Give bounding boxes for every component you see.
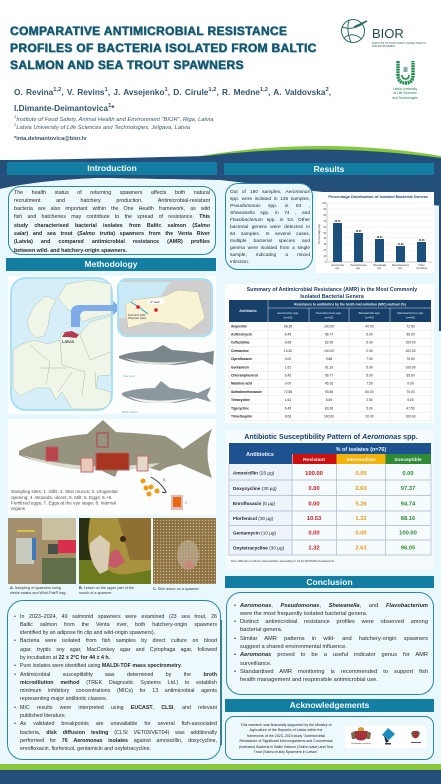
table: antibiotic susceptibility pattern of Aeromonas: 0.00 (402, 471, 414, 477)
table: antibiotic susceptibility pattern of Aeromonas: Oxytetracycline (30 µg) (233, 546, 285, 550)
illustration: Baltic salmon (122, 381, 211, 414)
contact email: *inta.deimantovica@bior.lv (14, 136, 87, 142)
table: antibiotic susceptibility pattern of Aeromonas: Gentamycin (10 µg) (233, 530, 277, 536)
table: summary of antimicrobial resistance: 5.00 (366, 332, 373, 336)
table: antibiotic susceptibility pattern of Aeromonas: 100.00 (399, 530, 417, 536)
logo: BIOR: INSTITUTE OF FOOD SAFETY, ANIMAL HEALTH (372, 42, 425, 45)
table: summary of antimicrobial resistance: 9.68 (285, 341, 291, 345)
table: summary of antimicrobial resistance: 8.06 (285, 414, 291, 418)
panel: introduction text: recruitment and hatchery production. Antimicrobial-resistant (14, 198, 210, 204)
illustration: sea trout (119, 345, 214, 378)
caption: sampling sites: Sampling sites: 1. Gills; 2. Skin mucus; 3. Urogenital (11, 489, 117, 494)
table: antibiotic susceptibility pattern of Aeromonas: 100.00 (305, 471, 323, 477)
panel: methods list: by incubation at 22 ± 2°C for 44 ± 4 h. (20, 655, 110, 661)
funding statement: Agriculture of the Republic of Latvia within the (250, 728, 322, 732)
authors: I.Dimante-Deimantovica1* (14, 103, 115, 113)
table title: Isolated Bacterial Genera (300, 294, 364, 300)
icon: eggs (140, 478, 160, 496)
table: summary of antimicrobial resistance: 5.00 (407, 398, 414, 402)
panel: methods list: enrofloxacin, florfenicol, gentamicin and oxytetracycline. (20, 746, 151, 752)
panel: methods list: Pure isolates were identified using MALDI-TOF mass spectrometry. (20, 663, 182, 669)
panel: methods list (7, 600, 221, 760)
table: summary of antimicrobial resistance: Flavobacterium spp. (397, 311, 424, 315)
panel: methods list: representing major antibiotic classes. (20, 696, 107, 702)
table: summary of antimicrobial resistance: 95.00 (406, 332, 415, 336)
title (10, 24, 317, 72)
logo: BIOR: AND ENVIRONMENT (372, 45, 395, 48)
caption: photo B (79, 586, 134, 595)
panel: methods list: As validated breakpoints are unavailable for several fish-associated (20, 721, 217, 727)
panel: conclusion list: Aeromonas proved to be a useful indicator genus for AMR (240, 652, 428, 658)
logo: Ministry of Agriculture: Zemkopības ministrija (351, 743, 371, 745)
panel: introduction text: between wild- and hatchery-origin spawners. (14, 248, 127, 254)
bar chart: percentage distribution of isolated bacterial genera: 33.68 (419, 240, 425, 242)
table: summary of antimicrobial resistance: Antibiotic (239, 309, 257, 313)
logo: Latvia University of Life Sciences and Technologies (392, 61, 418, 100)
table title: Summary of Antimicrobial Resistance (AMR) in the Most Commonly (247, 287, 417, 293)
map: Venta River inset: Pelči farm (MD) (128, 314, 146, 317)
map: Europe with Latvia highlighted (11, 278, 112, 410)
table: antibiotic susceptibility pattern of Aeromonas: 1.32 (355, 516, 367, 522)
table: summary of antimicrobial resistance: 83.26 (325, 406, 333, 410)
bar chart: percentage distribution of isolated bacterial genera: spp. (335, 267, 340, 270)
logo: Latvia University of Life Sciences and Technologies: and Technologies (392, 96, 418, 100)
bar chart: percentage distribution of isolated bacterial genera: 20 (323, 250, 327, 252)
illustration: Baltic salmon: Baltic salmon (122, 410, 139, 414)
table: antibiotic susceptibility pattern of Aeromonas: 0.00 (308, 502, 320, 508)
map: Europe with Latvia highlighted: Latvia (62, 339, 75, 344)
bar chart: percentage distribution of isolated bacterial genera: 70 (323, 221, 327, 223)
bar chart: percentage distribution of isolated bacterial genera: Percentage (%) (317, 224, 321, 244)
table: summary of antimicrobial resistance: 5.00 (366, 374, 373, 378)
table: antibiotic susceptibility pattern of Aeromonas: 5.26 (355, 502, 367, 508)
table: summary of antimicrobial resistance: 2.50 (366, 349, 373, 353)
panel: results text: Flavobacterium spp. in 53. Other (230, 218, 310, 223)
funding statement: Trout (Salmo trutta) Spawners in Latvia”. (254, 750, 318, 754)
bar chart: percentage distribution of isolated bacterial genera: Aeromonas (331, 264, 345, 267)
panel: results text: bacterial genera were detected in (230, 225, 310, 230)
affiliations (14, 114, 214, 131)
bar chart: percentage distribution of isolated bacterial genera: 10 (323, 256, 327, 258)
table: antibiotic susceptibility pattern of Aeromonas: 88.16 (401, 516, 416, 522)
table: summary of antimicrobial resistance: Resistance to antibiotics by the broth microdilution (MIC) method (%) (294, 302, 406, 306)
bar chart: percentage distribution of isolated bacterial genera: Other (418, 264, 425, 267)
table: summary of antimicrobial resistance: 0.00 (285, 357, 291, 361)
panel: conclusion list (226, 592, 434, 695)
panel: conclusion list: Similar AMR patterns in wild- and hatchery-origin spawners (240, 636, 428, 642)
table: summary of antimicrobial resistance: Trimethoprim (231, 414, 252, 418)
logo: Latvia University of Life Sciences and Technologies: of Life Sciences (393, 91, 417, 95)
panel: results text: Shewanella spp. in 74 , and (230, 211, 310, 216)
heading: Introduction (7, 162, 217, 175)
panel: conclusion list: surveillance. (240, 661, 272, 667)
bar chart: percentage distribution of isolated bacterial genera (316, 192, 434, 273)
panel: conclusion list: Distinct antimicrobial resistance profiles were observed among (240, 619, 428, 625)
caption: photo A: A. Sampling of spawners using (10, 586, 61, 590)
table: summary of antimicrobial resistance: Ceftazidime (231, 341, 250, 345)
panel: methods list: identified by an adipose fin clip and wild-origin spawners). (20, 630, 155, 636)
affiliations: 1Institute of Food Safety, Animal Health and Environment “BIOR”, Riga, Latvia (14, 114, 213, 122)
bar chart: percentage distribution of isolated bacterial genera: 60 (323, 227, 327, 229)
bar chart: percentage distribution of isolated bacterial genera: 80 (323, 215, 327, 217)
caption: sampling sites: Fertilized eggs; 7. Eggs at the eye stage; 8. Internal (11, 500, 116, 506)
funding statement: framework of the 2023–2024 study “Antimicrobial (247, 734, 325, 738)
table: antibiotic susceptibility pattern of Aeromonas: 10.53 (307, 516, 322, 522)
table: antibiotic susceptibility pattern of Aeromonas: Antibiotics (246, 452, 274, 458)
table: summary of antimicrobial resistance: 10.00 (365, 414, 374, 418)
title: PROFILES OF BACTERIA ISOLATED FROM BALTIC (10, 40, 317, 54)
bar chart: percentage distribution of isolated bacterial genera: 30 (323, 244, 327, 246)
table: summary of antimicrobial resistance: 2.50 (366, 398, 373, 402)
table: summary of antimicrobial resistance: 93.55 (325, 390, 333, 394)
table: summary of antimicrobial resistance: 45.16 (325, 382, 333, 386)
table title: Antibiotic Susceptibility Pattern of Aeromonas spp. (244, 433, 418, 441)
panel: results text: Out of 190 samples, Aeromonas (230, 190, 310, 195)
panel: methods list: Bacteria were isolated from fish samples by direct culture on blood (20, 638, 217, 644)
table: summary of antimicrobial resistance: 100.00 (405, 341, 416, 345)
panel: methods list: agar, tryptic soy agar, MacConkey agar and Cytophaga agar, followed (20, 647, 217, 653)
arrow: map to Venta River inset (71, 301, 121, 327)
table: summary of antimicrobial resistance: 91.29 (325, 365, 333, 369)
affiliations: 2Latvia University of Life Sciences and Technologies, Jelgava, Latvia (14, 122, 190, 131)
table: summary of antimicrobial resistance: 72.50 (406, 324, 415, 328)
table: antibiotic susceptibility pattern of Aeromonas: Florfenicol (30 µg) (233, 516, 274, 521)
table: summary of antimicrobial resistance: 5.00 (366, 406, 373, 410)
map: Venta River inset: Pārplūdes ūdeņi (128, 317, 147, 320)
table: summary of antimicrobial resistance: 0.00 (407, 382, 414, 386)
icon: eye-stage egg sample (171, 495, 188, 510)
panel: methods list: In 2023–2024, 49 salmonid spawners were examined (23 sea trout, 26 (20, 614, 217, 620)
table: summary of antimicrobial resistance: 100.00 (405, 349, 416, 353)
heading: Acknowledgements: Acknowledgements (290, 700, 369, 710)
table: antibiotic susceptibility pattern of Aeromonas: 97.37 (401, 486, 415, 492)
table: summary of antimicrobial resistance: 8.06 (326, 398, 332, 402)
table: summary of antimicrobial resistance: 5.00 (366, 365, 373, 369)
logo: BIOR (341, 19, 426, 48)
table: summary of antimicrobial resistance: 6.45 (285, 332, 291, 336)
bar chart: percentage distribution of isolated bacterial genera: spp. (398, 267, 403, 270)
logos: partner organisations (377, 726, 426, 748)
table: summary of antimicrobial resistance: 98.39 (284, 324, 292, 328)
table: antibiotic susceptibility pattern of Aeromonas (226, 430, 434, 569)
table: summary of antimicrobial resistance: Sulfadimethoxazole (231, 390, 262, 394)
panel: sampling sites on a fish (8, 419, 216, 515)
icon: milt tube (151, 477, 166, 493)
table: summary of antimicrobial resistance: Azithromycin (231, 332, 252, 336)
heading: Acknowledgements (225, 699, 434, 712)
panel: conclusion list: health management and responsible antimicrobial use. (240, 677, 378, 683)
panel: methods list: MIC results were interpreted using EUCAST, CLSI, and relevant (20, 705, 217, 711)
panel: results text: spp. were isolated in 125 samples, (230, 197, 310, 202)
bar chart: percentage distribution of isolated bacterial genera: spp. (377, 267, 382, 270)
panel: results text: sample, indicating a mixed (230, 253, 310, 258)
bar chart: percentage distribution of isolated bacterial genera: 38.95 (377, 237, 383, 239)
table: summary of antimicrobial resistance: 1.61 (285, 365, 291, 369)
table: summary of antimicrobial resistance: (n=62) (325, 316, 333, 320)
table: antibiotic susceptibility pattern of Aeromonas: 0.00 (355, 471, 367, 477)
bar chart: percentage distribution of isolated bacterial genera: 27.89 (398, 244, 404, 246)
table: summary of antimicrobial resistance: 14.52 (284, 349, 292, 353)
title: COMPARATIVE ANTIMICROBIAL RESISTANCE (10, 24, 287, 38)
caption: photo A: sterile swabs and Whirl-Pak® bag. (10, 590, 66, 594)
panel: conclusion list: Standardised AMR monitoring is recommended to support fish (240, 669, 428, 675)
caption: photo B: mouth of a spawner. (79, 590, 112, 594)
bars (333, 223, 426, 262)
table: summary of antimicrobial resistance: Tigecycline (231, 406, 249, 410)
panel: methods list: minimum inhibitory concentrations (MICs) for 13 antimicrobial agents (20, 688, 217, 694)
table: summary of antimicrobial resistance: 0.00 (285, 382, 291, 386)
table: summary of antimicrobial resistance: Ciprofloxacin (231, 357, 252, 361)
table: antibiotic susceptibility pattern of Aeromonas: 94.74 (401, 502, 416, 508)
panel: conclusion list: were the most frequently isolated bacterial genera. (240, 611, 367, 617)
table: summary of antimicrobial resistance: Gentamicin (231, 365, 249, 369)
table: summary of antimicrobial resistance: 100.00 (405, 414, 416, 418)
table: summary of antimicrobial resistance: 70.00 (406, 390, 415, 394)
table: summary of antimicrobial resistance: 100.00 (324, 414, 334, 418)
icon: eye-stage egg sample: 7. (185, 501, 188, 505)
illustration: fish with sampling sites (19, 420, 212, 478)
panel: conclusion list: suggest a shared environmental influence. (240, 644, 347, 650)
panel: introduction text: salar) and sea trout (Salmo trutta) spawners from the Venta River (14, 231, 210, 237)
photo B: lesion on the mouth (79, 518, 151, 584)
table: summary of antimicrobial resistance: 5.00 (366, 341, 373, 345)
panel: results text: infection. (230, 260, 249, 265)
panel: results text: genera were isolated from a single (230, 246, 310, 251)
heading: Methodology: Methodology (85, 259, 137, 269)
table: summary of antimicrobial resistance: 6.45 (285, 374, 291, 378)
heading: Conclusion: Conclusion (306, 577, 353, 587)
panel: introduction text: study characterised bacterial isolates from Baltic salmon (Salmo (14, 223, 210, 229)
bar chart: percentage distribution of isolated bacterial genera: 50 (323, 233, 327, 235)
table: summary of antimicrobial resistance: (n=62) (284, 316, 292, 320)
bar chart: percentage distribution of isolated bacterial genera: microflora (416, 267, 428, 270)
table: summary of antimicrobial resistance: 40.00 (365, 324, 374, 328)
map: Venta River inset (118, 279, 212, 336)
table: antibiotic susceptibility pattern of Aeromonas: Amoxicillin (25 µg) (233, 470, 275, 476)
panel: methods list: Baltic salmon from the Venta river, both hatchery-origin spawners (20, 622, 217, 628)
table: antibiotic susceptibility pattern of Aeromonas: 96.05 (401, 546, 416, 552)
authors (14, 87, 331, 113)
table: antibiotic susceptibility pattern of Aeromonas: 1.32 (308, 546, 320, 552)
bar chart: percentage distribution of isolated bacterial genera: Percentage Distribution of Isolated Bacterial Genera (328, 194, 428, 199)
table footnote: Disc diffusion method; interpretation according to CLSI VET03/04 breakpoints. (231, 559, 335, 563)
caption: photo C: C. Skin lesion on a spawner. (153, 586, 200, 590)
panel: sampling location map and fish species (8, 276, 216, 414)
table: summary of antimicrobial resistance: 100.00 (324, 349, 334, 353)
logo: Ministry of Agriculture (345, 726, 377, 748)
panel: results text: multiple bacterial species and (230, 239, 310, 244)
table: summary of antimicrobial resistance: 6.45 (285, 406, 291, 410)
authors: O. Revina1,2, V. Revins1, J. Avsejenko1, D. Cirule1,2, R. Medne1,2, A. Valdovska2, (14, 87, 331, 97)
photos: sampling and lesions (8, 518, 216, 584)
table: summary of antimicrobial resistance: Pseudomonas spp. (316, 311, 342, 315)
panel: sampling sites on a fish: 5. (163, 478, 166, 482)
table: summary of antimicrobial resistance: 7.50 (366, 357, 373, 361)
table: antibiotic susceptibility pattern of Aeromonas: Enrofloxacin (5 µg) (233, 501, 275, 506)
table: summary of antimicrobial resistance: Cefotaxime (231, 349, 249, 353)
panel: results text: Pseudomonas spp. in 93 , (230, 204, 310, 209)
table: antibiotic susceptibility pattern of Aeromonas: 2.63 (355, 486, 367, 492)
table: summary of antimicrobial resistance: (n=40) (406, 316, 415, 320)
bar chart: percentage distribution of isolated bacterial genera: 90 (323, 209, 327, 211)
photo C: skin lesion (153, 518, 216, 584)
bar chart: percentage distribution of isolated bacterial genera: 40 (323, 238, 327, 240)
heading: Results (224, 163, 434, 175)
table: summary of antimicrobial resistance: 96.77 (325, 332, 333, 336)
bar chart: percentage distribution of isolated bacterial genera: 65.79 (335, 221, 341, 223)
funding statement: This research was financially supported by the Ministry of (240, 723, 332, 727)
table: antibiotic susceptibility pattern of Aeromonas: 2.63 (355, 546, 367, 552)
illustration: sea trout: Sea trout (123, 374, 135, 378)
table: antibiotic susceptibility pattern of Aeromonas: Resistant (303, 457, 325, 463)
panel: introduction text: fish and hatcheries may contribute to the spread of resistance. This (14, 214, 210, 220)
panel: methods list: Antimicrobial susceptibility was determined by the broth (20, 672, 217, 678)
table: summary of antimicrobial resistance: 7.50 (366, 382, 373, 386)
panel: methods list: performed for 76 Aeromonas isolates against amoxicillin, doxycycline, (20, 738, 217, 744)
caption: sampling sites: organs (11, 506, 26, 511)
table: summary of antimicrobial resistance: Aeromonas spp. (276, 311, 299, 315)
caption: photo B: B. Lesion on the upper part of the (79, 586, 134, 590)
bar chart: percentage distribution of isolated bacterial genera: Shewanella (373, 264, 387, 267)
panel: introduction text (8, 186, 216, 255)
panel: introduction text: The health status of returning spawners affects both natural (14, 190, 210, 196)
table: summary of antimicrobial resistance: Nalidixic acid (231, 382, 252, 386)
table: antibiotic susceptibility pattern of Aeromonas: Intermediate (346, 457, 376, 463)
bar chart: percentage distribution of isolated bacterial genera: Pseudomonas (351, 264, 367, 267)
funding statement (239, 723, 333, 754)
panel: acknowledgements (225, 716, 434, 760)
table: summary of antimicrobial resistance: 65.00 (406, 374, 415, 378)
logo: BIOR: BIOR (372, 26, 404, 41)
table: summary of antimicrobial resistance: 9.68 (326, 357, 332, 361)
panel: introduction text: (Latvia) and compared antimicrobial resistance (AMR) profiles (14, 239, 210, 245)
panel: conclusion list: Aeromonas, Pseudomonas, Shewanella, and Flavobacterium (240, 602, 428, 608)
title: SALMON AND SEA TROUT SPAWNERS (10, 58, 244, 72)
table: summary of antimicrobial resistance: 75.00 (406, 357, 415, 361)
panel: introduction text: bacteria are also important within the One Health framework, as wild (14, 206, 210, 212)
table: summary of antimicrobial resistance: Ampicillin (231, 324, 247, 328)
logo: Latvia University of Life Sciences and Technologies: Latvia University (393, 87, 417, 91)
panel: results text (225, 183, 313, 270)
panel: methods list: bacteria, disk diffusion testing (CLSI VET03/VET04) was additionally (20, 730, 217, 736)
panel: methods list: published literature. (20, 713, 66, 719)
bar chart: percentage distribution of isolated bacterial genera: 100 (322, 203, 327, 205)
heading: Results: Results (314, 164, 344, 174)
table: summary of antimicrobial resistance (225, 284, 434, 423)
table: summary of antimicrobial resistance: 80.00 (365, 390, 374, 394)
panel: methods list: microdilution method (TREK Diagnostic Systems Ltd.) to establish (20, 680, 217, 686)
table: summary of antimicrobial resistance: Chloramphenicol (231, 374, 258, 378)
photo A: swabs and field sampling (8, 518, 76, 584)
table: antibiotic susceptibility pattern of Aeromonas: 0.00 (308, 486, 320, 492)
funding statement: (Indicator) Bacteria in Baltic Salmon (Salmo salar) and Sea (239, 745, 333, 749)
table: antibiotic susceptibility pattern of Aeromonas: % of isolates (n=76) (336, 447, 386, 453)
funding statement: Resistance of Significant Microorganisms and Commensal (240, 739, 332, 743)
heading: Methodology (6, 258, 216, 271)
panel: conclusion list: bacterial genera. (240, 627, 282, 633)
table: summary of antimicrobial resistance: 100.00 (324, 324, 334, 328)
bar chart: percentage distribution of isolated bacterial genera: spp. (356, 267, 361, 270)
heading: Conclusion (225, 576, 434, 588)
map: Venta River inset: Ā° ᴍᴋᴍ (150, 300, 160, 304)
table: summary of antimicrobial resistance: 62.90 (325, 341, 333, 345)
table: summary of antimicrobial resistance: 100.00 (405, 365, 416, 369)
heading: Introduction: Introduction (87, 163, 137, 173)
table: antibiotic susceptibility pattern of Aeromonas: Doxycycline (30 µg) (233, 486, 277, 491)
table: summary of antimicrobial resistance: 1.61 (285, 398, 291, 402)
table: summary of antimicrobial resistance: 72.58 (284, 390, 292, 394)
table: summary of antimicrobial resistance: Tetracycline (231, 398, 250, 402)
panel: results text: 64 samples. In several cases, (230, 232, 310, 237)
caption: sampling sites: opening; 4. Wounds, ulcers; 5. Milt; 6. Eggs; 5.+6. (11, 495, 112, 500)
bar chart: percentage distribution of isolated bacterial genera: 48.95 (356, 230, 362, 233)
caption: photo A (10, 586, 66, 595)
bar chart: percentage distribution of isolated bacterial genera: Flavobacterium (392, 264, 409, 267)
table: summary of antimicrobial resistance: 96.77 (325, 374, 333, 378)
table: summary of antimicrobial resistance: (n=40) (365, 316, 374, 320)
table: antibiotic susceptibility pattern of Aeromonas: 0.00 (308, 530, 320, 536)
bar chart: percentage distribution of isolated bacterial genera: 0 (325, 262, 327, 264)
table: summary of antimicrobial resistance: Shewanella spp. (358, 311, 381, 315)
table: summary of antimicrobial resistance: 47.50 (406, 406, 415, 410)
table: antibiotic susceptibility pattern of Aeromonas: Susceptible (394, 457, 422, 463)
table: antibiotic susceptibility pattern of Aeromonas: 0.00 (355, 530, 367, 536)
